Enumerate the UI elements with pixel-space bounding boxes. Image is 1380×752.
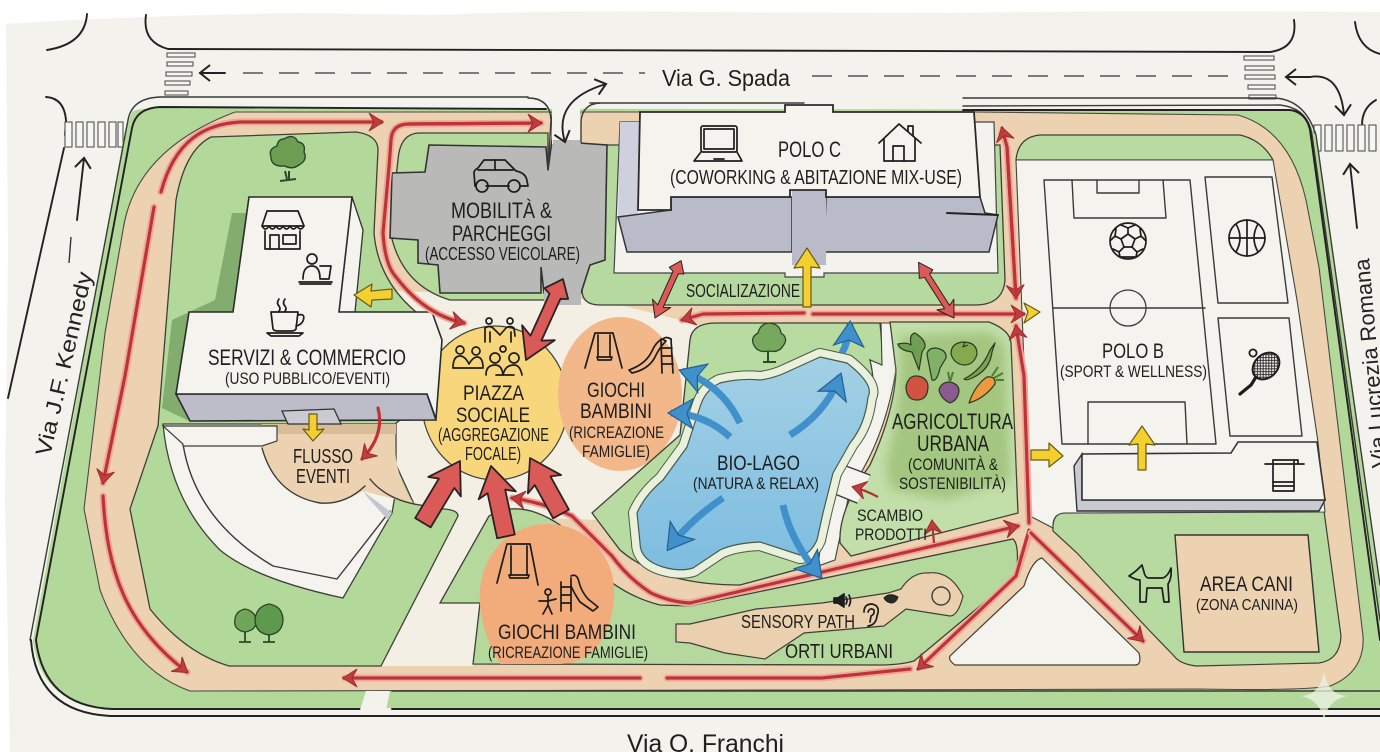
labels: building and area names: SENSORY PATH	[741, 612, 855, 632]
icon: slide north	[629, 338, 673, 373]
scambio bridge edges	[825, 463, 870, 503]
icon: trees south	[235, 604, 283, 642]
labels: building and area names: FAMIGLIE)	[582, 442, 650, 461]
icon: house	[879, 124, 921, 161]
bio-lago lake	[637, 357, 869, 570]
green block: orti urbani lawn	[440, 509, 1017, 665]
labels: building and area names: URBANA	[917, 431, 989, 456]
labels: building and area names: (ZONA CANINA)	[1196, 597, 1298, 614]
yellow arrows	[303, 248, 1155, 470]
roads and street markings	[8, 14, 1380, 398]
labels: building and area names: AGRICOLTURA	[892, 409, 1013, 434]
servizi building	[162, 197, 442, 424]
icon: soccer ball	[1110, 223, 1146, 259]
icon: person at desk	[299, 254, 332, 284]
labels: building and area names: POLO C	[778, 137, 841, 162]
icon: tennis racket	[1240, 347, 1285, 394]
labels: building and area names: SOSTENIBILITÀ)	[899, 474, 1006, 493]
icon: people handshake	[485, 318, 515, 342]
labels: building and area names: FOCALE)	[465, 444, 521, 464]
icon: basketball	[1229, 220, 1265, 256]
veggies icons	[898, 333, 1004, 403]
icon: sound	[834, 594, 850, 607]
agricoltura urbana planting	[887, 332, 1010, 500]
icon: tree lake park	[753, 323, 786, 362]
driveway edges	[528, 98, 600, 170]
entrance gap on Via O. Franchi	[360, 691, 390, 710]
central plaza surface	[380, 290, 720, 666]
labels: building and area names: BIO-LAGO	[717, 452, 800, 475]
street labels: Via G. Spada	[662, 65, 790, 91]
giochi bambini south disc	[480, 524, 614, 664]
labels: building and area names: SOCIALE	[456, 404, 530, 427]
green block: north-east lawn	[1016, 135, 1273, 160]
labels: building and area names: GIOCHI BAMBINI	[498, 621, 636, 644]
scambio bridge	[825, 463, 870, 503]
polo b building	[1074, 442, 1325, 511]
labels: building and area names: ORTI URBANI	[785, 641, 893, 663]
labels: building and area names: POLO B	[1102, 340, 1164, 363]
icon: eye	[884, 595, 898, 603]
crosswalks	[65, 53, 1376, 151]
icon: dog	[1129, 565, 1171, 602]
labels: building and area names: (RICREAZIONE	[569, 423, 664, 442]
labels: building and area names: SOCIALIZAZIONE	[686, 281, 800, 301]
labels: building and area names: AREA CANI	[1200, 573, 1293, 596]
fat double arrow: parking to plaza	[510, 272, 579, 367]
labels: building and area names: (ACCESSO VEICOLARE)	[425, 244, 580, 264]
icon: towel rack	[1265, 460, 1304, 491]
labels: building and area names: FLUSSO	[293, 446, 353, 468]
icon: car	[474, 160, 528, 192]
sparkle mark	[1301, 672, 1347, 720]
labels: building and area names: BAMBINI	[580, 400, 652, 423]
polo c building	[614, 105, 998, 277]
labels: building and area names: MOBILITÀ &	[451, 198, 552, 223]
driveway to parking	[553, 140, 580, 160]
icon: shop	[262, 211, 304, 249]
labels: building and area names: PARCHEGGI	[452, 221, 551, 246]
street labels: Via J.F. Kennedy	[31, 269, 97, 458]
sensory path pond marker	[932, 587, 950, 605]
driveway double arrow	[562, 84, 606, 142]
icon: swing north	[585, 333, 622, 368]
piazza sociale disc	[422, 326, 568, 480]
labels: building and area names: (COWORKING & ABITAZIONE MIX-USE)	[670, 167, 962, 189]
blue lake flow arrows	[669, 324, 850, 576]
green block: Polo C lawn	[582, 145, 1005, 305]
giochi bambini north disc	[558, 317, 682, 471]
south driveway from parking	[544, 266, 581, 305]
icon: laptop	[694, 126, 742, 161]
labels: building and area names: PIAZZA	[463, 382, 524, 405]
green block: south-east lawn	[1053, 511, 1341, 666]
amphitheatre plaza	[163, 424, 414, 598]
site ground: green perimeter	[33, 108, 1380, 708]
double arrow: polo c to giochi	[646, 257, 690, 322]
labels: building and area names: GIOCHI	[587, 379, 645, 402]
area cani plot	[1175, 535, 1319, 652]
icon: coffee cup	[267, 299, 304, 336]
parking area	[390, 140, 607, 293]
green block: south strip lines	[392, 690, 1380, 692]
labels: building and area names: (USO PUBBLICO/EVENTI)	[225, 369, 390, 388]
labels: building and area names: (SPORT & WELLNESS)	[1060, 362, 1207, 381]
white triangle lot	[950, 558, 1140, 665]
fat arrow: north giochi to plaza	[407, 451, 476, 533]
sensory path surface	[676, 573, 963, 659]
double arrow: polo c to lake path	[910, 257, 962, 323]
red pedestrian flow arrows	[103, 122, 1143, 678]
labels: building and area names: (RICREAZIONE FAMIGLIE)	[488, 643, 648, 662]
icon: tree north-west	[270, 137, 305, 181]
perimeter path: tan walkway	[84, 112, 1363, 691]
labels: building and area names: SCAMBIO	[857, 506, 923, 525]
driveway surface	[552, 100, 581, 144]
green block: north-west lawn	[130, 132, 458, 666]
green block: parking lawn	[390, 133, 548, 300]
lake park lawn	[592, 323, 884, 585]
labels: building and area names	[208, 137, 1298, 663]
icon: ear	[864, 604, 878, 626]
icon: group of people	[453, 346, 522, 375]
icon: swing south	[497, 544, 538, 585]
labels: building and area names: SERVIZI & COMMERCIO	[208, 345, 406, 370]
icon: child	[539, 589, 556, 614]
icon: slide south	[561, 575, 598, 611]
fat arrow: south giochi to plaza	[472, 462, 525, 540]
labels: building and area names: EVENTI	[296, 466, 350, 488]
labels: building and area names: (COMUNITÀ &	[908, 455, 999, 474]
polo b sports ground	[1016, 160, 1325, 528]
labels: building and area names: (AGGREGAZIONE	[438, 425, 549, 445]
fat arrow: lake path to plaza	[513, 449, 578, 523]
path beside lake	[818, 323, 896, 566]
labels: building and area names: PRODOTTI	[855, 525, 927, 544]
agricoltura urbana plot	[840, 322, 1018, 556]
labels: building and area names: (NATURA & RELAX)	[693, 474, 819, 493]
